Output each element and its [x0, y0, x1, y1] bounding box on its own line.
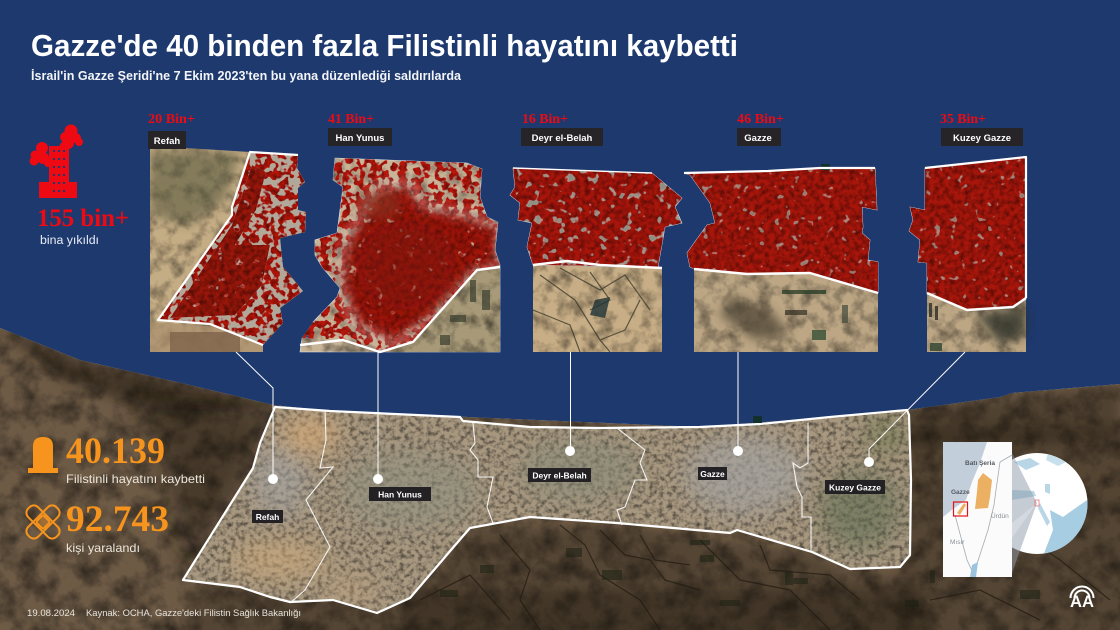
- injured stat: 92.743: [66, 499, 169, 540]
- panel: Gazze: [684, 164, 878, 352]
- west bank shape: [975, 473, 992, 509]
- gaza sliver and red box: [957, 503, 966, 515]
- region value labels: 20 Bin+: [148, 112, 195, 127]
- deaths stat: [66, 431, 205, 486]
- panel: Kuzey Gazze: [909, 157, 1026, 352]
- strip region labels: Refah: [256, 512, 279, 522]
- region value labels: 16 Bin+: [522, 112, 568, 127]
- strip region labels: [252, 467, 885, 523]
- inset labels: Ürdün: [991, 512, 1009, 520]
- region name tags: Gazze: [744, 133, 772, 144]
- inset locator map: [943, 442, 1012, 577]
- destroyed buildings stat: [37, 205, 129, 247]
- region name tags: Deyr el-Belah: [532, 133, 593, 144]
- destroyed buildings stat: 155 bin+: [37, 205, 129, 232]
- injured stat: kişi yaralandı: [66, 541, 140, 555]
- logo: AA: AA: [1070, 592, 1094, 611]
- panel: Deyr el-Belah: [510, 168, 682, 352]
- inset labels: Gazze: [951, 489, 970, 496]
- globe locator: [1012, 453, 1088, 573]
- internal governorate borders: [290, 410, 811, 603]
- region name tags: Han Yunus: [336, 133, 384, 144]
- region value labels: 41 Bin+: [328, 112, 374, 127]
- source line: 19.08.2024: [27, 608, 75, 619]
- icon: bandage: [24, 503, 62, 541]
- region name tags: Refah: [154, 136, 180, 147]
- port marker: [753, 416, 762, 423]
- deaths stat: 40.139: [66, 431, 165, 472]
- subtitle: İsrail'in Gazze Şeridi'ne 7 Ekim 2023'ten bu yana düzenlediği saldırılarda: [31, 68, 462, 83]
- satellite land base: [0, 328, 1120, 630]
- source line: Kaynak: OCHA, Gazze'deki Filistin Sağlık Bakanlığı: [86, 608, 301, 619]
- panel: Han Yunus: [300, 158, 500, 352]
- icon: gravestone: [28, 437, 58, 473]
- region value labels: 46 Bin+: [737, 112, 784, 127]
- connector lines and map dots: [236, 352, 965, 484]
- strip region labels: Han Yunus: [378, 490, 422, 500]
- strip outline: [183, 407, 911, 613]
- region value labels: [148, 112, 986, 127]
- inset labels: [950, 460, 1009, 546]
- panel: Refah: [150, 140, 310, 355]
- strip region labels: Kuzey Gazze: [829, 482, 881, 492]
- inset labels: Batı Şeria: [965, 460, 995, 467]
- inset labels: Mısır: [950, 539, 965, 546]
- region value labels: 35 Bin+: [940, 112, 986, 127]
- region name tags: [148, 128, 1023, 149]
- region name tags: Kuzey Gazze: [953, 133, 1011, 144]
- gaza strip satellite map: [175, 400, 920, 615]
- strip region labels: Deyr el-Belah: [532, 470, 587, 480]
- icon: destroyed building: [30, 124, 83, 198]
- strip region labels: Gazze: [700, 469, 725, 479]
- destroyed buildings stat: bina yıkıldı: [40, 235, 99, 247]
- title: Gazze'de 40 binden fazla Filistinli hayatını kaybetti: [31, 28, 738, 63]
- deaths stat: Filistinli hayatını kaybetti: [66, 472, 205, 486]
